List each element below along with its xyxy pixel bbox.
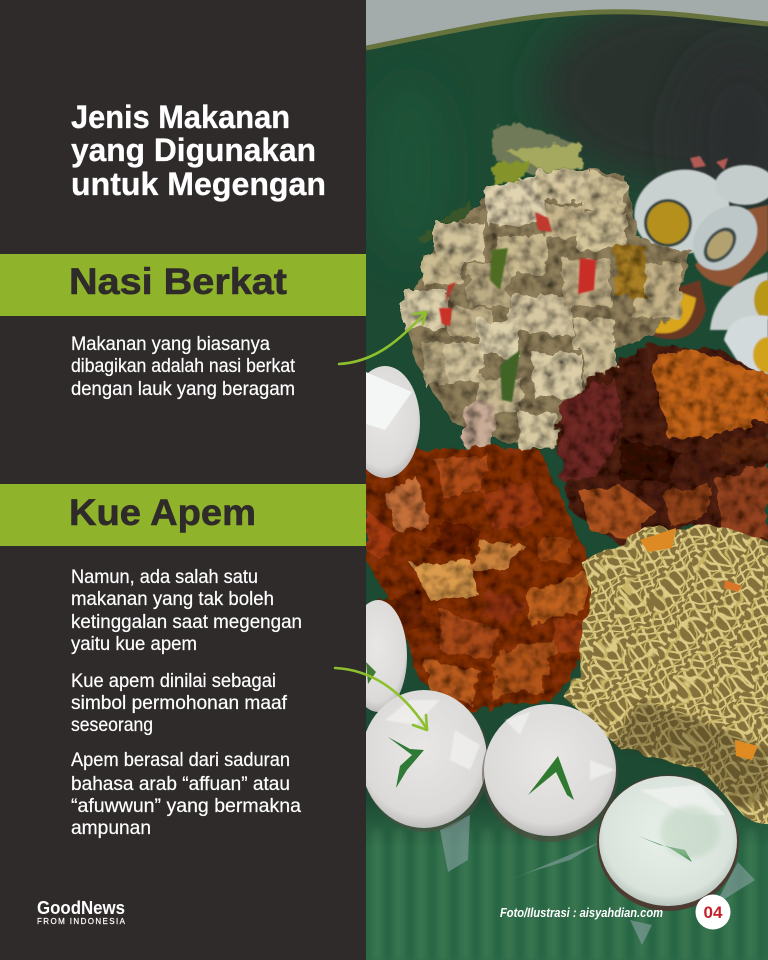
banner: Kue Apem (0, 484, 366, 546)
text block: Kue Apem description: ampunan (71, 817, 151, 839)
apem: highlights (385, 700, 725, 815)
photo: tempeh and tofu pile (402, 168, 692, 450)
photo credit: Foto/Ilustrasi : aisyahdian.com (500, 905, 663, 920)
photo: apem cakes (349, 366, 755, 945)
apem: pandan leaves (388, 737, 424, 788)
photo: fried noodles (565, 525, 768, 825)
arrow: to kue apem (335, 668, 427, 730)
title: Jenis Makanan (71, 99, 290, 135)
text block: Kue Apem description: simbol permohonan maaf (71, 692, 288, 714)
text block: Nasi Berkat description (71, 333, 296, 400)
banner: Nasi Berkat: Nasi Berkat (69, 261, 287, 302)
logo: GoodNews from Indonesia: FROM INDONESIA (37, 917, 126, 926)
left dark panel (0, 0, 366, 960)
text block: Kue Apem description: makanan yang tak boleh (71, 588, 274, 610)
page number badge: 04 (704, 903, 723, 922)
apem: plastic wraps (440, 815, 755, 945)
photo: pickles (418, 124, 582, 244)
title: yang Digunakan (71, 132, 316, 168)
photo: table background (366, 0, 768, 46)
banner: Nasi Berkat (0, 254, 366, 316)
photo: chilies and greens (439, 212, 596, 402)
text block: Kue Apem description: “afuwwun” yang bermakna (71, 795, 301, 817)
text block: Nasi Berkat description: dibagikan adalah nasi berkat (71, 355, 296, 377)
text block: Nasi Berkat description: Makanan yang biasanya (71, 333, 270, 355)
text block: Kue Apem description: yaitu kue apem (71, 633, 197, 655)
banner: Kue Apem: Kue Apem (69, 492, 256, 533)
photo: salted eggs (625, 156, 768, 376)
logo: GoodNews from Indonesia (37, 898, 126, 926)
title (71, 99, 326, 202)
text block: Kue Apem description: ketinggalan saat megengan (71, 611, 302, 633)
title: untuk Megengan (71, 166, 326, 202)
text block: Kue Apem description: Kue apem dinilai sebagai (71, 670, 276, 692)
text block: Kue Apem description: bahasa arab “affuan” atau (71, 773, 290, 795)
photo: grilled chicken (555, 345, 768, 545)
page number badge (696, 894, 730, 930)
photo: noodle shading and carrots (610, 528, 768, 808)
text block: Kue Apem description: seseorang (71, 714, 153, 736)
text block: Nasi Berkat description: dengan lauk yang beragam (71, 378, 295, 400)
photo: banana leaf (366, 0, 768, 960)
text block: Kue Apem description: Namun, ada salah satu (71, 566, 258, 588)
food photograph (349, 0, 768, 960)
logo: GoodNews from Indonesia: GoodNews (37, 898, 125, 918)
arrow: to nasi berkat (339, 312, 426, 364)
text block: Kue Apem description (71, 566, 302, 839)
photo: sambal chips (366, 445, 598, 712)
text block: Kue Apem description: Apem berasal dari saduran (71, 749, 290, 771)
